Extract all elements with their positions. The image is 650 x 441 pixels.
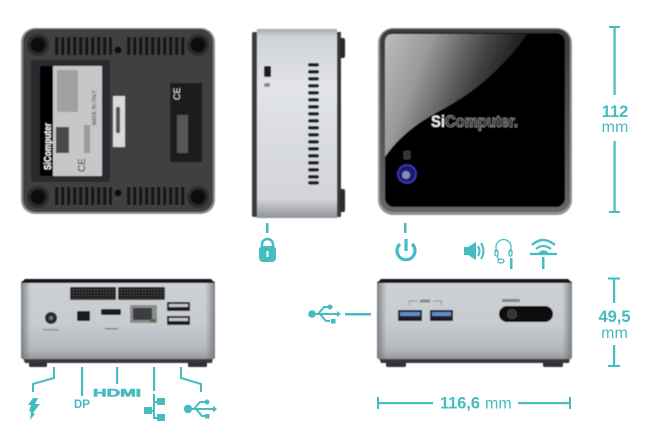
- HDMI port: [101, 309, 121, 315]
- icon: headset: [495, 240, 512, 269]
- panel: bottom view of device: [21, 28, 215, 214]
- leader line: power: [404, 223, 406, 233]
- leader line: HDMI: [116, 367, 118, 384]
- power jack: [45, 312, 57, 324]
- panel: bottom view of device: CE: [77, 158, 88, 172]
- icon: lock: [259, 239, 276, 262]
- panel: top view of device: [378, 28, 572, 215]
- dimension: height 49,5 mm: mm: [601, 325, 628, 342]
- icon: network: [144, 394, 165, 421]
- leader line: network: [153, 367, 155, 391]
- USB 3.0 ports: [398, 310, 422, 321]
- leader line: USB: [181, 367, 201, 392]
- logo: SiComputer.: [431, 112, 518, 131]
- icon: wifi: [530, 240, 557, 269]
- panel: bottom view of device: SiComputer: [43, 123, 54, 170]
- DisplayPort: [77, 311, 90, 321]
- label: DP: DP: [74, 399, 90, 411]
- power button: [398, 165, 416, 183]
- dimension: width 116,6 mm: 116,6: [440, 394, 480, 412]
- leader line: power input: [33, 367, 54, 392]
- panel: side view of device: [252, 29, 345, 218]
- dimension: depth 112 mm: mm: [602, 119, 628, 136]
- side ventilation slots: [308, 63, 319, 185]
- leader line: DP: [81, 367, 83, 396]
- label: HDMI logo: HDMI: [93, 388, 141, 400]
- dimension: width 116,6 mm: mm: [485, 396, 512, 412]
- dimension: height 49,5 mm: 49,5: [598, 308, 631, 326]
- dimension: height 49,5 mm: [598, 278, 631, 367]
- panel: front view of device: [377, 279, 572, 367]
- icon: USB: [184, 400, 217, 418]
- dimension: width 116,6 mm: [377, 394, 571, 412]
- dimension: depth 112 mm: [602, 26, 628, 213]
- dimension: depth 112 mm: 112: [602, 103, 628, 121]
- panel: bottom view of device: MADE IN ITALY: [92, 89, 98, 125]
- icon: power: [397, 239, 415, 260]
- Ethernet port: [130, 305, 157, 323]
- USB rear ports: [167, 302, 190, 311]
- icon: USB front: [308, 304, 341, 324]
- leader line: lock: [266, 223, 268, 233]
- icon: speaker: [464, 242, 484, 260]
- icon: lightning: [28, 398, 40, 420]
- audio jack panel: [499, 306, 553, 322]
- panel: rear view of device: [21, 279, 215, 367]
- panel: bottom view of device: CE: [172, 87, 182, 100]
- leader line: front USB: [345, 313, 371, 316]
